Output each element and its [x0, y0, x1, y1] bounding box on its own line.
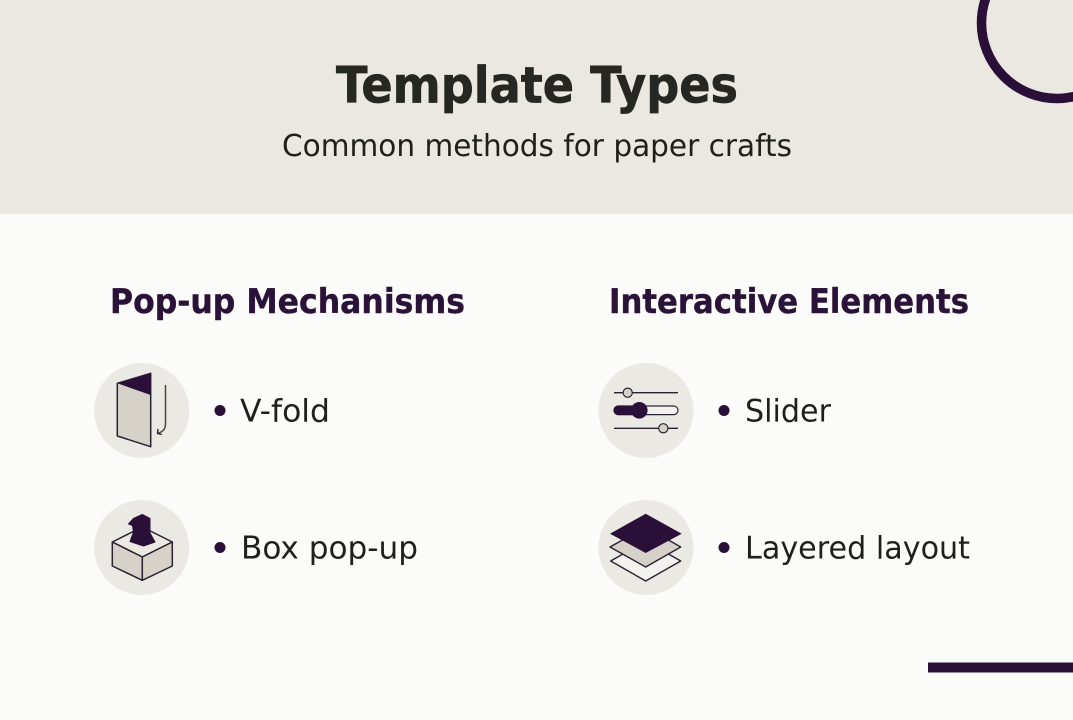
bullet	[214, 405, 226, 416]
panel: interactive elements	[598, 282, 970, 595]
bullet	[718, 542, 730, 553]
icon: v-fold card	[94, 363, 189, 458]
item: v-fold	[94, 363, 330, 458]
icon: box pop-up	[94, 500, 189, 595]
item: slider	[598, 363, 831, 458]
heading: interactive elements: Interactive Elements	[609, 282, 969, 321]
label: slider: Slider	[745, 394, 831, 430]
item: layered layout	[598, 500, 970, 595]
item: box pop-up	[94, 500, 418, 595]
subtitle: Common methods for paper crafts	[282, 129, 792, 164]
icon: layers	[598, 500, 694, 595]
decorative bar	[928, 662, 1073, 672]
bullet	[214, 542, 226, 553]
heading: pop-up mechanisms: Pop-up Mechanisms	[110, 282, 465, 321]
title: Template Types	[336, 56, 738, 114]
bullet	[718, 405, 730, 416]
label: layered layout: Layered layout	[745, 530, 970, 566]
label: box pop-up: Box pop-up	[241, 530, 418, 566]
panel: pop-up mechanisms	[94, 282, 465, 595]
icon: sliders	[598, 363, 694, 458]
decorative circle	[982, 0, 1073, 98]
header band	[0, 0, 1073, 214]
label: v-fold: V-fold	[240, 394, 330, 430]
